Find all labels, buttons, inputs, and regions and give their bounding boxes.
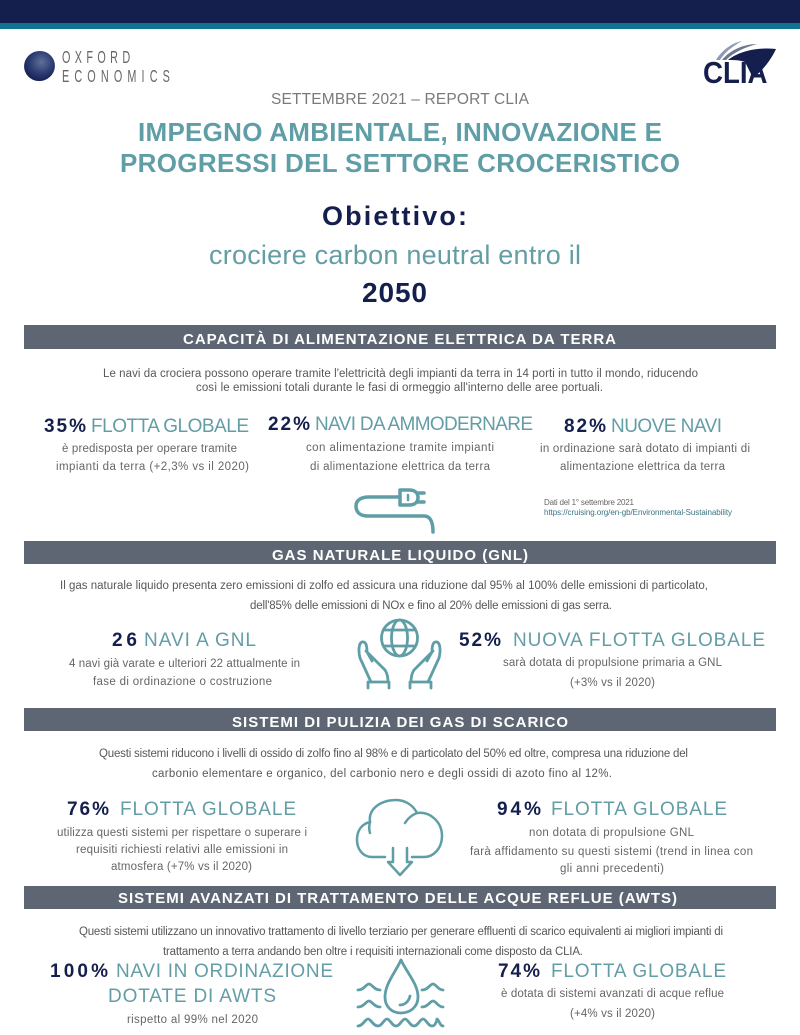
section header: shore power — [24, 325, 776, 349]
stat: 94% — [470, 799, 753, 875]
section header: AWTS — [24, 886, 776, 909]
stat: 35% — [44, 416, 249, 473]
stat: 26 ships: fase di ordinazione o costruzione — [93, 676, 272, 688]
LNG intro: Il gas naturale liquido presenta zero emissioni di zolfo ed assicura una riduzione dal 95% al 100% delle emissioni di particolato, — [60, 580, 708, 592]
LNG intro: dell'85% delle emissioni di NOx e fino al 20% delle emissioni di gas serra. — [250, 600, 612, 612]
stat: 94%: FLOTTA GLOBALE — [551, 799, 727, 820]
stat: 74% — [498, 961, 726, 1020]
shore power intro: così le emissioni totali durante le fasi di ormeggio all'interno delle aree portuali. — [196, 382, 603, 394]
scrubbers intro: carbonio elementare e organico, del carbonio nero e degli ossidi di azoto fino al 12%. — [152, 768, 612, 780]
stat: 82%: NUOVE NAVI — [611, 416, 722, 437]
objective: 2050 — [362, 277, 427, 308]
logo: CLIA: CLIA — [703, 56, 768, 91]
section header: scrubbers — [24, 708, 776, 731]
logo: Oxford Economics — [20, 47, 170, 87]
title: PROGRESSI DEL SETTORE CROCERISTICO — [120, 148, 680, 178]
stat: 52%: 52% — [459, 630, 501, 651]
stat: 76%: atmosfera (+7% vs il 2020) — [111, 861, 252, 873]
stat: 76%: requisiti richiesti relativi alle emissioni in — [76, 844, 288, 856]
stat: 22%: con alimentazione tramite impianti — [306, 442, 494, 454]
section header: shore power: CAPACITÀ DI ALIMENTAZIONE ELETTRICA DA TERRA — [183, 331, 616, 348]
stat: 35%: 35% — [44, 416, 86, 437]
title — [120, 117, 680, 178]
stat: 52% — [459, 630, 765, 689]
stat: 74%: FLOTTA GLOBALE — [551, 961, 726, 982]
logo: Oxford Economics: ECONOMICS — [62, 68, 170, 87]
stat: 35%: impianti da terra (+2,3% vs il 2020) — [56, 461, 249, 473]
stat: 76%: 76% — [67, 799, 109, 820]
stat: 94%: non dotata di propulsione GNL — [529, 827, 695, 839]
LNG intro — [60, 580, 708, 612]
stat: 82%: alimentazione elettrica da terra — [560, 461, 726, 473]
shore power intro — [103, 368, 698, 394]
stat: 94%: gli anni precedenti) — [560, 863, 664, 875]
source note: Dati del 1° settembre 2021 — [544, 498, 635, 507]
stat: 22%: NAVI DA AMMODERNARE — [315, 414, 533, 435]
stat: 94%: 94% — [497, 799, 541, 820]
objective — [209, 201, 581, 308]
stat: 82% — [540, 416, 750, 473]
stat: 76%: utilizza questi sistemi per rispettare o superare i — [57, 827, 307, 839]
stat: 74%: 74% — [498, 961, 540, 982]
AWTS intro: Questi sistemi utilizzano un innovativo trattamento di livello terziario per generare effluenti di scarico equivalenti ai migliori impianti di — [79, 926, 723, 938]
stat: 82%: in ordinazione sarà dotato di impianti di — [540, 443, 750, 455]
top banner — [0, 0, 800, 29]
icon: plug — [356, 490, 433, 532]
objective: Obiettivo: — [322, 201, 467, 231]
objective: crociere carbon neutral entro il — [209, 240, 581, 270]
icon: globe in hands — [359, 620, 440, 688]
stat: 52%: (+3% vs il 2020) — [570, 677, 655, 689]
stat: 76%: FLOTTA GLOBALE — [120, 799, 296, 820]
section header: LNG — [24, 541, 776, 564]
source note: https://cruising.org/en-gb/Environmental-Sustainability — [544, 508, 732, 517]
stat: 100%: 100% — [50, 961, 108, 982]
stat: 26 ships: NAVI A GNL — [144, 630, 256, 651]
stat: 82%: 82% — [564, 416, 606, 437]
stat: 22%: 22% — [268, 414, 310, 435]
report date: SETTEMBRE 2021 – REPORT CLIA — [271, 91, 530, 108]
stat: 76% — [57, 799, 307, 873]
stat: 74%: (+4% vs il 2020) — [570, 1008, 655, 1020]
stat: 94%: farà affidamento su questi sistemi (trend in linea con — [470, 846, 753, 858]
title: IMPEGNO AMBIENTALE, INNOVAZIONE E — [138, 117, 662, 147]
logo: Oxford Economics: OXFORD — [62, 49, 130, 68]
stat: 22%: di alimentazione elettrica da terra — [310, 461, 491, 473]
stat: 100%: NAVI IN ORDINAZIONE — [116, 961, 333, 982]
scrubbers intro: Questi sistemi riducono i livelli di ossido di zolfo fino al 98% e di particolato del 50% ed oltre, compresa una riduzione del — [99, 748, 688, 760]
stat: 52%: sarà dotata di propulsione primaria a GNL — [503, 657, 723, 669]
stat: 52%: NUOVA FLOTTA GLOBALE — [513, 630, 765, 651]
scrubbers intro — [99, 748, 688, 780]
AWTS intro — [79, 926, 723, 958]
stat: 100%: DOTATE DI AWTS — [108, 986, 276, 1007]
icon: cloud with down arrow — [357, 800, 442, 875]
stat: 100%: rispetto al 99% nel 2020 — [127, 1014, 258, 1026]
stat: 100% — [50, 961, 333, 1026]
section header: LNG: GAS NATURALE LIQUIDO (GNL) — [272, 547, 528, 564]
AWTS intro: trattamento a terra andando ben oltre i requisiti internazionali come disposto da CLIA. — [163, 946, 583, 958]
logo: CLIA — [703, 41, 776, 91]
stat: 26 ships — [69, 630, 300, 688]
stat: 26 ships: 26 — [112, 630, 137, 651]
stat: 35%: è predisposta per operare tramite — [62, 443, 237, 455]
stat: 74%: è dotata di sistemi avanzati di acque reflue — [501, 988, 724, 1000]
section header: AWTS: SISTEMI AVANZATI DI TRATTAMENTO DELLE ACQUE REFLUE (AWTS) — [118, 890, 677, 907]
stat: 22% — [268, 414, 533, 473]
stat: 35%: FLOTTA GLOBALE — [91, 416, 249, 437]
stat: 26 ships: 4 navi già varate e ulteriori 22 attualmente in — [69, 658, 300, 670]
icon: water drop and waves — [358, 960, 443, 1026]
source note — [544, 498, 732, 517]
section header: scrubbers: SISTEMI DI PULIZIA DEI GAS DI SCARICO — [232, 714, 568, 731]
shore power intro: Le navi da crociera possono operare tramite l'elettricità degli impianti da terra in 14 porti in tutto il mondo, riducendo — [103, 368, 698, 380]
